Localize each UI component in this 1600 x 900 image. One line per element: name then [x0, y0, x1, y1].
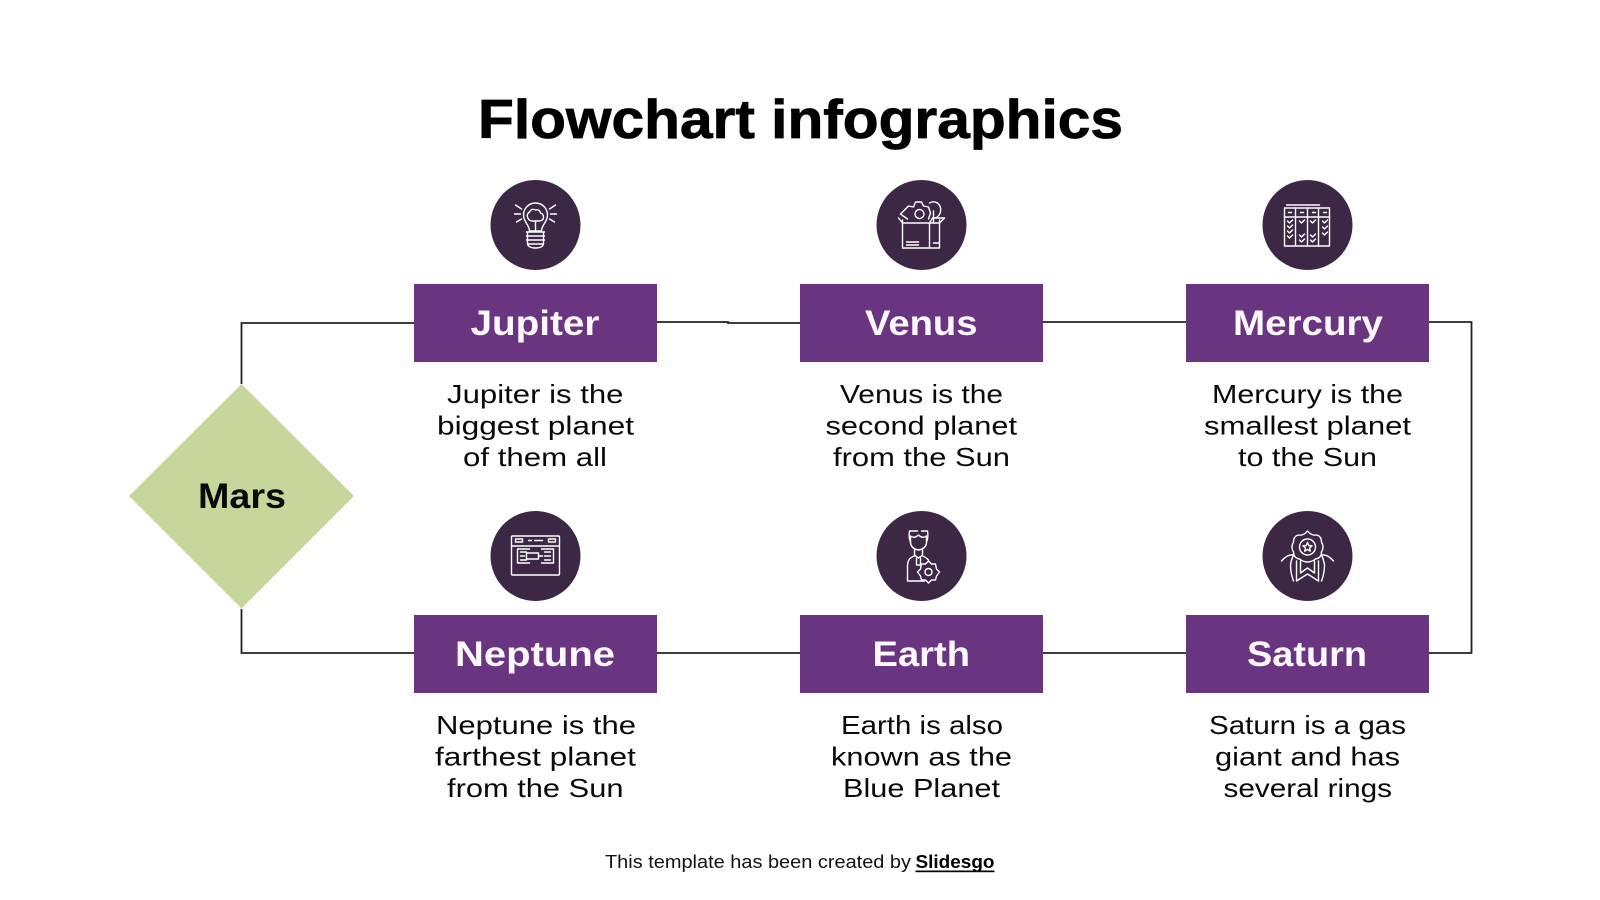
description: Neptune: from the Sun: [447, 773, 624, 803]
description: Jupiter: of them all: [463, 442, 607, 472]
label box: Jupiter: [414, 284, 657, 362]
description: Earth: [831, 710, 1012, 803]
label box: Mercury: [1186, 284, 1429, 362]
description: Neptune: Neptune is the: [436, 710, 636, 740]
icon: browser flow diagram: [490, 511, 580, 601]
label box: Venus: Venus: [865, 304, 978, 343]
label box: Venus: [800, 284, 1043, 362]
label box: Earth: [800, 615, 1043, 693]
description: Saturn: Saturn is a gas: [1209, 710, 1406, 740]
flow connectors: [242, 322, 1472, 653]
description: Saturn: giant and has: [1215, 742, 1400, 772]
description: Jupiter: [437, 379, 635, 472]
footer credit: Slidesgo: [916, 851, 994, 872]
label box: Earth: Earth: [872, 635, 970, 674]
step: Mercury: [1186, 180, 1429, 472]
description: Neptune: farthest planet: [435, 742, 637, 772]
description: Venus: [826, 379, 1018, 472]
icon: award rosette: [1262, 511, 1352, 601]
description: Mercury: to the Sun: [1238, 442, 1377, 472]
description: Venus: from the Sun: [833, 442, 1010, 472]
decision node: Mars: Mars: [198, 477, 286, 516]
title: Flowchart infographics: [478, 88, 1123, 150]
step: Venus: [800, 180, 1043, 472]
description: Mercury: smallest planet: [1204, 410, 1412, 440]
description: Saturn: [1209, 710, 1406, 803]
description: Saturn: several rings: [1224, 773, 1392, 803]
step: Saturn: [1186, 511, 1429, 803]
step: Neptune: [414, 511, 657, 803]
description: Earth: Earth is also: [841, 710, 1003, 740]
step: Jupiter: [414, 180, 657, 472]
label box: Neptune: Neptune: [455, 635, 615, 674]
label box: Saturn: [1186, 615, 1429, 693]
label box: Jupiter: Jupiter: [470, 304, 600, 343]
icon: engineer with gear: [876, 511, 966, 601]
label box: Mercury: Mercury: [1233, 304, 1384, 343]
description: Neptune: [435, 710, 637, 803]
label box: Saturn: Saturn: [1247, 635, 1367, 674]
label box: Neptune: [414, 615, 657, 693]
footer credit: This template has been created by: [605, 851, 912, 872]
description: Earth: known as the: [831, 742, 1012, 772]
icon: light bulb with brain: [490, 180, 580, 270]
description: Earth: Blue Planet: [843, 773, 1001, 803]
description: Mercury: Mercury is the: [1212, 379, 1403, 409]
description: Jupiter: Jupiter is the: [447, 379, 624, 409]
icon: checklist calendar: [1262, 180, 1352, 270]
description: Jupiter: biggest planet: [437, 410, 635, 440]
description: Venus: second planet: [826, 410, 1018, 440]
step: Earth: [800, 511, 1043, 803]
icon: open box with items: [876, 180, 966, 270]
decision node: Mars: [129, 384, 354, 608]
description: Venus: Venus is the: [840, 379, 1003, 409]
description: Mercury: [1204, 379, 1412, 472]
